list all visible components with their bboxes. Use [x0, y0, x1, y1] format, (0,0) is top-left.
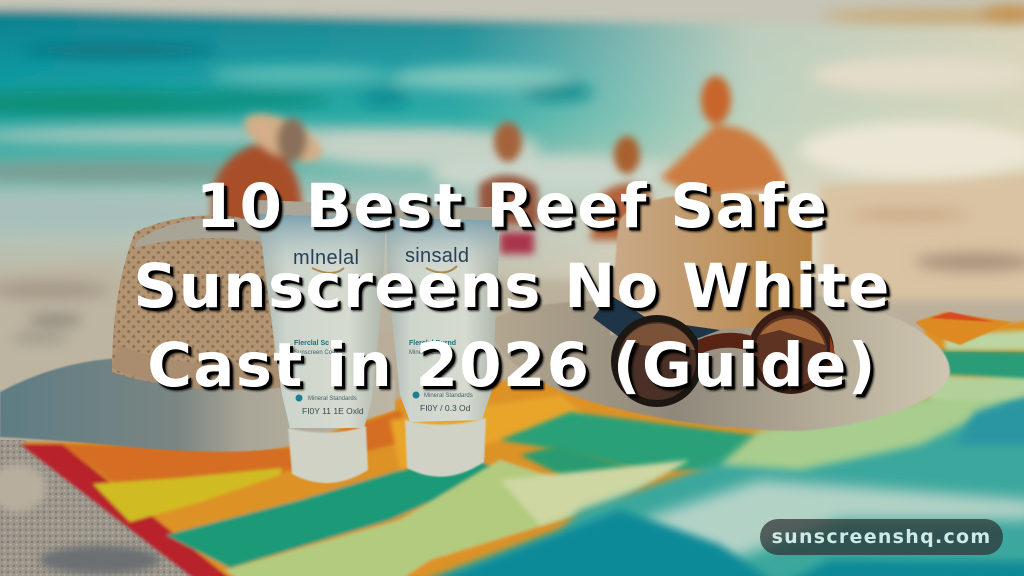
website badge: sunscreenshq.com: [772, 526, 991, 548]
blurred people: [212, 76, 788, 254]
website badge: [760, 519, 1003, 555]
sunscreen tube left: Flerclal Sc: [294, 340, 329, 347]
sunglasses: [611, 308, 838, 407]
hat right: [490, 192, 950, 431]
hat left: [0, 215, 395, 452]
sunscreen tube right: Flerclal Burnd: [409, 340, 456, 347]
sunscreen tube right: FI0Y / 0.3 Od: [420, 403, 471, 413]
title: [133, 171, 892, 401]
sea: [0, 0, 1024, 300]
sunscreen tube left: mlnelal: [293, 247, 359, 269]
title: Cast in 2026 (Guide): [147, 330, 877, 401]
towel: [0, 312, 1024, 576]
title: 10 Best Reef Safe: [196, 171, 828, 242]
sunscreen tube left: [258, 200, 387, 483]
sunscreen tube left: Mineral Standards: [308, 396, 357, 402]
title: Sunscreens No White: [133, 251, 891, 322]
sunscreen tube left: Sunscreen Coat: [294, 350, 337, 356]
sand middle: [0, 210, 1024, 420]
sunscreen tube left: FI0Y 11 1E Oxld: [302, 406, 364, 416]
sunscreen tube right: sinsald: [405, 245, 469, 267]
sunscreen tube right: Mineral Standards: [424, 393, 473, 399]
sunscreen tube right: Mineral Coat: [409, 350, 443, 356]
sunscreen tube right: [385, 205, 500, 477]
